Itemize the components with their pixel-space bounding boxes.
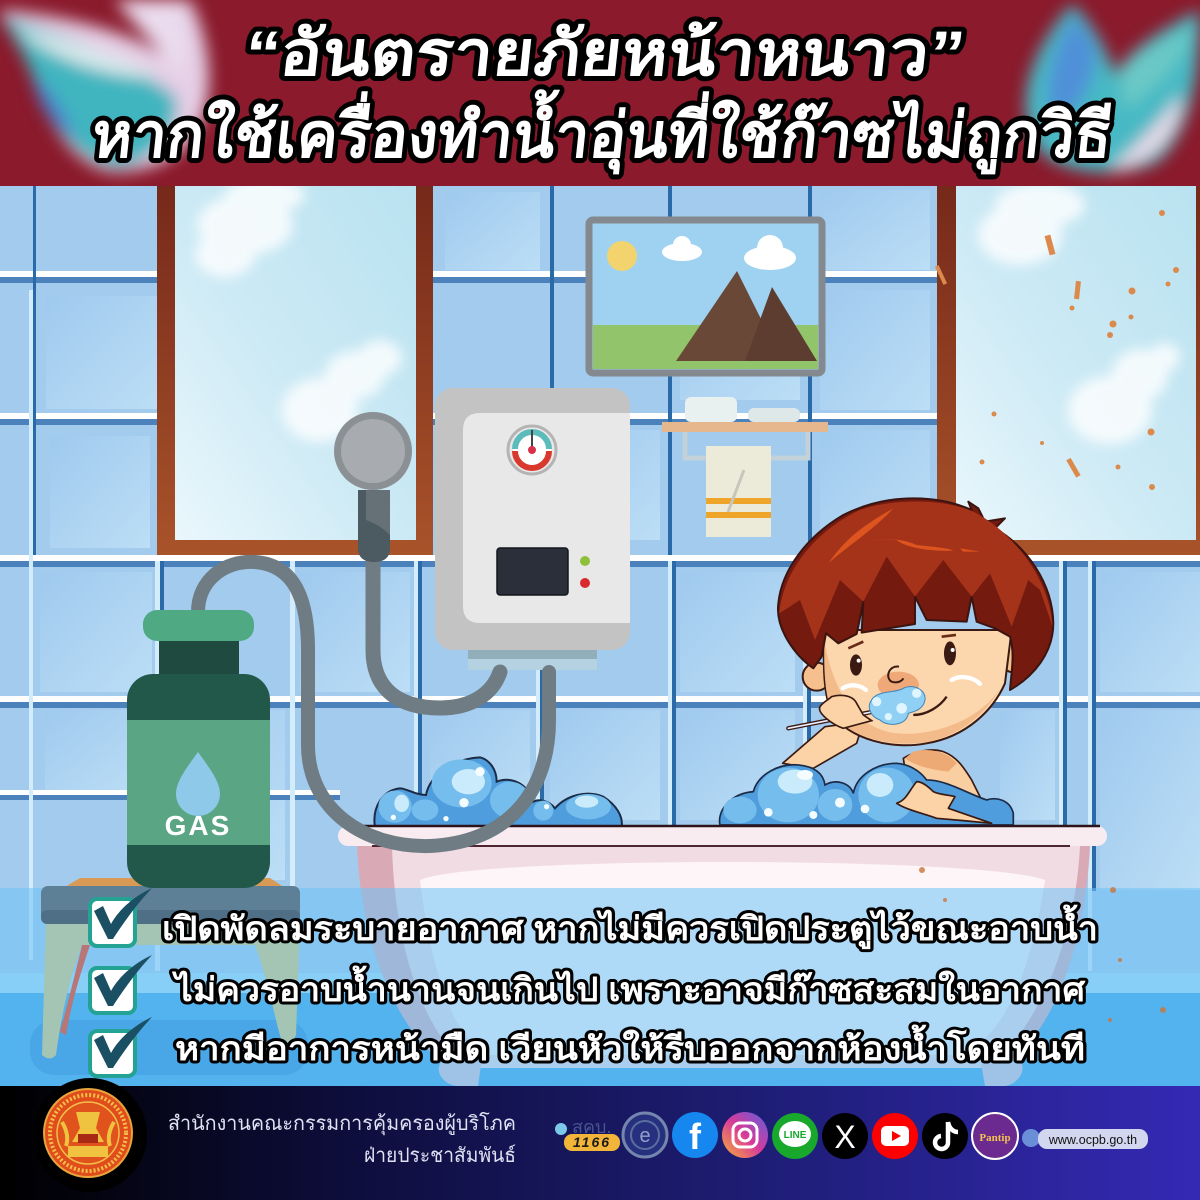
toothbrush and foam: [788, 687, 925, 728]
gas label: GAS: [165, 810, 231, 841]
website pill: [1022, 1129, 1148, 1149]
boy arms and body: [783, 722, 993, 823]
department name: ฝ่ายประชาสัมพันธ์: [364, 1144, 516, 1167]
icon: instagram: [722, 1112, 768, 1158]
icon: x: [822, 1113, 868, 1159]
icon: youtube: [872, 1113, 918, 1159]
hair locks and highlights: [779, 501, 1053, 640]
icon: gas drop: [176, 752, 220, 816]
stool: [41, 878, 300, 1058]
water heater: [435, 388, 630, 670]
checkbox two: [90, 955, 152, 1013]
boy ears: [803, 641, 1031, 691]
hotline badge: [555, 1117, 620, 1151]
decorative flame left: [0, 0, 209, 172]
icon: tiktok: [922, 1113, 968, 1159]
seal of the office: [33, 1078, 147, 1192]
icon: facebook: [672, 1112, 718, 1158]
decorative flame right: [1026, 4, 1200, 172]
rust specks: [919, 867, 1166, 1022]
icon: facebook: f: [689, 1116, 702, 1157]
bubbles left: [374, 757, 622, 827]
icon: ocpb: [623, 1113, 667, 1157]
heater gauge: [508, 426, 556, 474]
gas hose: [198, 562, 549, 846]
shower hose: [373, 560, 500, 708]
boy hand on chest: [897, 782, 992, 823]
bubbles around the boy: [720, 763, 1013, 825]
icon: pantip: [972, 1113, 1018, 1159]
translucent panel behind tips: [0, 888, 1200, 1086]
icon: ocpb: e: [639, 1125, 651, 1147]
floor: [0, 973, 1200, 1093]
hotline badge: สคบ.: [572, 1117, 611, 1137]
boy brushing teeth in bubbles: [720, 498, 1053, 825]
bathroom tiled wall: [0, 180, 1200, 980]
boy face: [824, 630, 1012, 745]
heater display: [497, 548, 568, 595]
hotline badge: 1166: [573, 1134, 611, 1150]
tip one: เปิดพัดลมระบายอากาศ หากไม่มีควรเปิดประตูไว้ขณะอาบน้ำ: [162, 904, 1098, 950]
icon: x: X: [834, 1119, 856, 1155]
right window: [935, 183, 1200, 555]
footer bar: [0, 1078, 1200, 1200]
organisation name: สำนักงานคณะกรรมการคุ้มครองผู้บริโภค: [168, 1112, 516, 1136]
tip two: ไม่ควรอาบน้ำนานจนเกินไป เพราะอาจมีก๊าซสะสมในอากาศ: [172, 965, 1086, 1008]
boy hair: [778, 498, 1053, 690]
shower head: [334, 412, 412, 562]
painting on the wall: [589, 220, 822, 373]
bathtub: [338, 826, 1107, 1086]
title line one: “อันตรายภัยหน้าหนาว”: [242, 19, 968, 89]
tip three: หากมีอาการหน้ามืด เวียนหัวให้รีบออกจากห้องน้ำโดยทันที: [175, 1024, 1085, 1067]
title line two: หากใช้เครื่องทำน้ำอุ่นที่ใช้ก๊าซไม่ถูกวิธี: [88, 89, 1117, 175]
icon: line: [772, 1113, 818, 1159]
left window: [157, 177, 433, 555]
header banner: [0, 0, 1200, 186]
gas cylinder: [127, 610, 270, 888]
checkbox one: [90, 888, 152, 946]
checklist of safety tips: [90, 888, 1098, 1076]
checkbox three: [90, 1017, 152, 1076]
boy face details: [824, 635, 1000, 744]
icon: pantip: Pantip: [979, 1132, 1011, 1144]
towel rack: [662, 397, 828, 537]
icon: line: LINE: [784, 1130, 807, 1141]
website pill: www.ocpb.go.th: [1048, 1133, 1137, 1147]
